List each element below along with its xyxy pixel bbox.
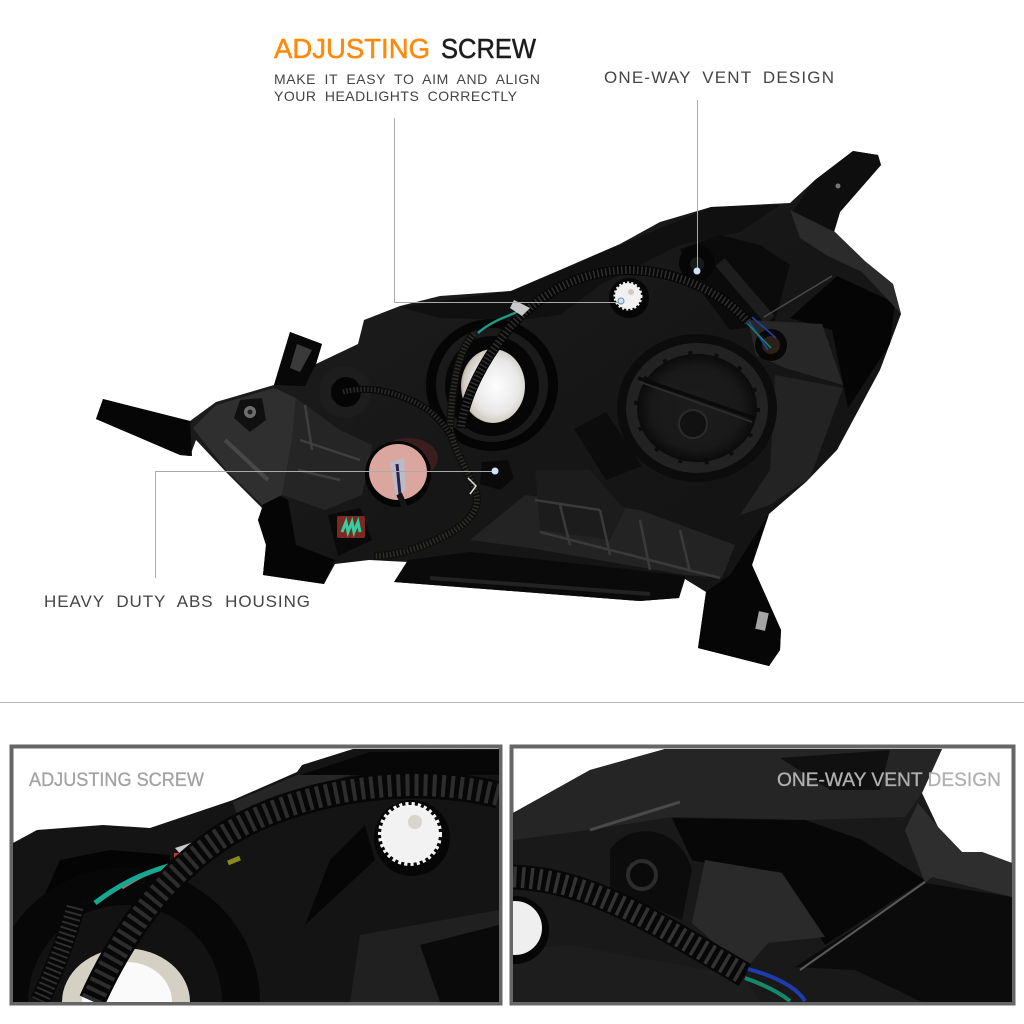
one-way vent — [679, 245, 715, 281]
lighter left housing panels — [193, 388, 296, 505]
heading: adjusting screw: ADJUSTING — [274, 33, 430, 64]
center lower housing — [470, 495, 735, 578]
label: one-way vent design: ONE-WAY VENT DESIGN — [604, 68, 834, 87]
description text — [274, 71, 540, 104]
vent closeup — [610, 831, 692, 920]
corrugated wiring loom — [343, 270, 748, 556]
adjusting screw gear — [609, 278, 649, 318]
projector lens assembly — [426, 319, 558, 451]
wires closeup — [122, 872, 156, 890]
leader line: ABS housing — [156, 472, 492, 578]
area right of cap — [740, 375, 843, 515]
marker: one-way vent — [694, 268, 700, 274]
left mounting bracket — [96, 399, 192, 456]
large round rear cap — [617, 334, 777, 482]
headlight housing silhouette — [96, 151, 901, 666]
top housing body shade — [400, 205, 780, 320]
corrugated loom closeup — [513, 877, 745, 975]
pink bulb socket — [365, 438, 438, 507]
upper right recess — [680, 235, 790, 330]
panel title: ADJUSTING SCREW — [29, 770, 204, 791]
lower left bracket — [258, 490, 335, 584]
leader line: one-way vent — [696, 100, 698, 270]
wire clip — [480, 460, 514, 490]
lens closeup — [13, 867, 260, 1002]
electrical connector plug — [328, 508, 372, 556]
corrugated looms closeup — [40, 785, 499, 1001]
lower right bracket — [698, 514, 781, 666]
rubber grommet — [319, 366, 371, 418]
panel: one-way vent detail — [481, 746, 1014, 1004]
upper left clip — [274, 332, 322, 386]
lower lens edge — [394, 552, 685, 601]
dark housing closeup — [513, 749, 1012, 1002]
dark housing closeup — [13, 749, 499, 1002]
panel title: ONE-WAY VENT DESIGN — [777, 770, 1001, 791]
headlight photo illustration — [96, 151, 901, 666]
heading: adjusting screw: SCREW — [441, 33, 537, 64]
gear closeup — [374, 800, 450, 876]
gear closeup — [513, 896, 549, 964]
panel: adjusting screw detail — [12, 746, 500, 1004]
green wires — [478, 311, 520, 333]
leader line: adjusting screw — [394, 118, 620, 302]
description text: YOUR HEADLIGHTS CORRECTLY — [274, 88, 518, 104]
label: heavy duty ABS housing: HEAVY DUTY ABS HOUSING — [44, 592, 310, 611]
connector closeup — [175, 842, 192, 853]
marker: ABS housing — [492, 468, 498, 474]
rear wiring socket — [746, 317, 843, 385]
wires closeup — [748, 969, 805, 1001]
description text: MAKE IT EASY TO AIM AND ALIGN — [274, 71, 540, 87]
marker: adjusting screw — [618, 298, 624, 304]
top mounting tab — [790, 151, 881, 232]
